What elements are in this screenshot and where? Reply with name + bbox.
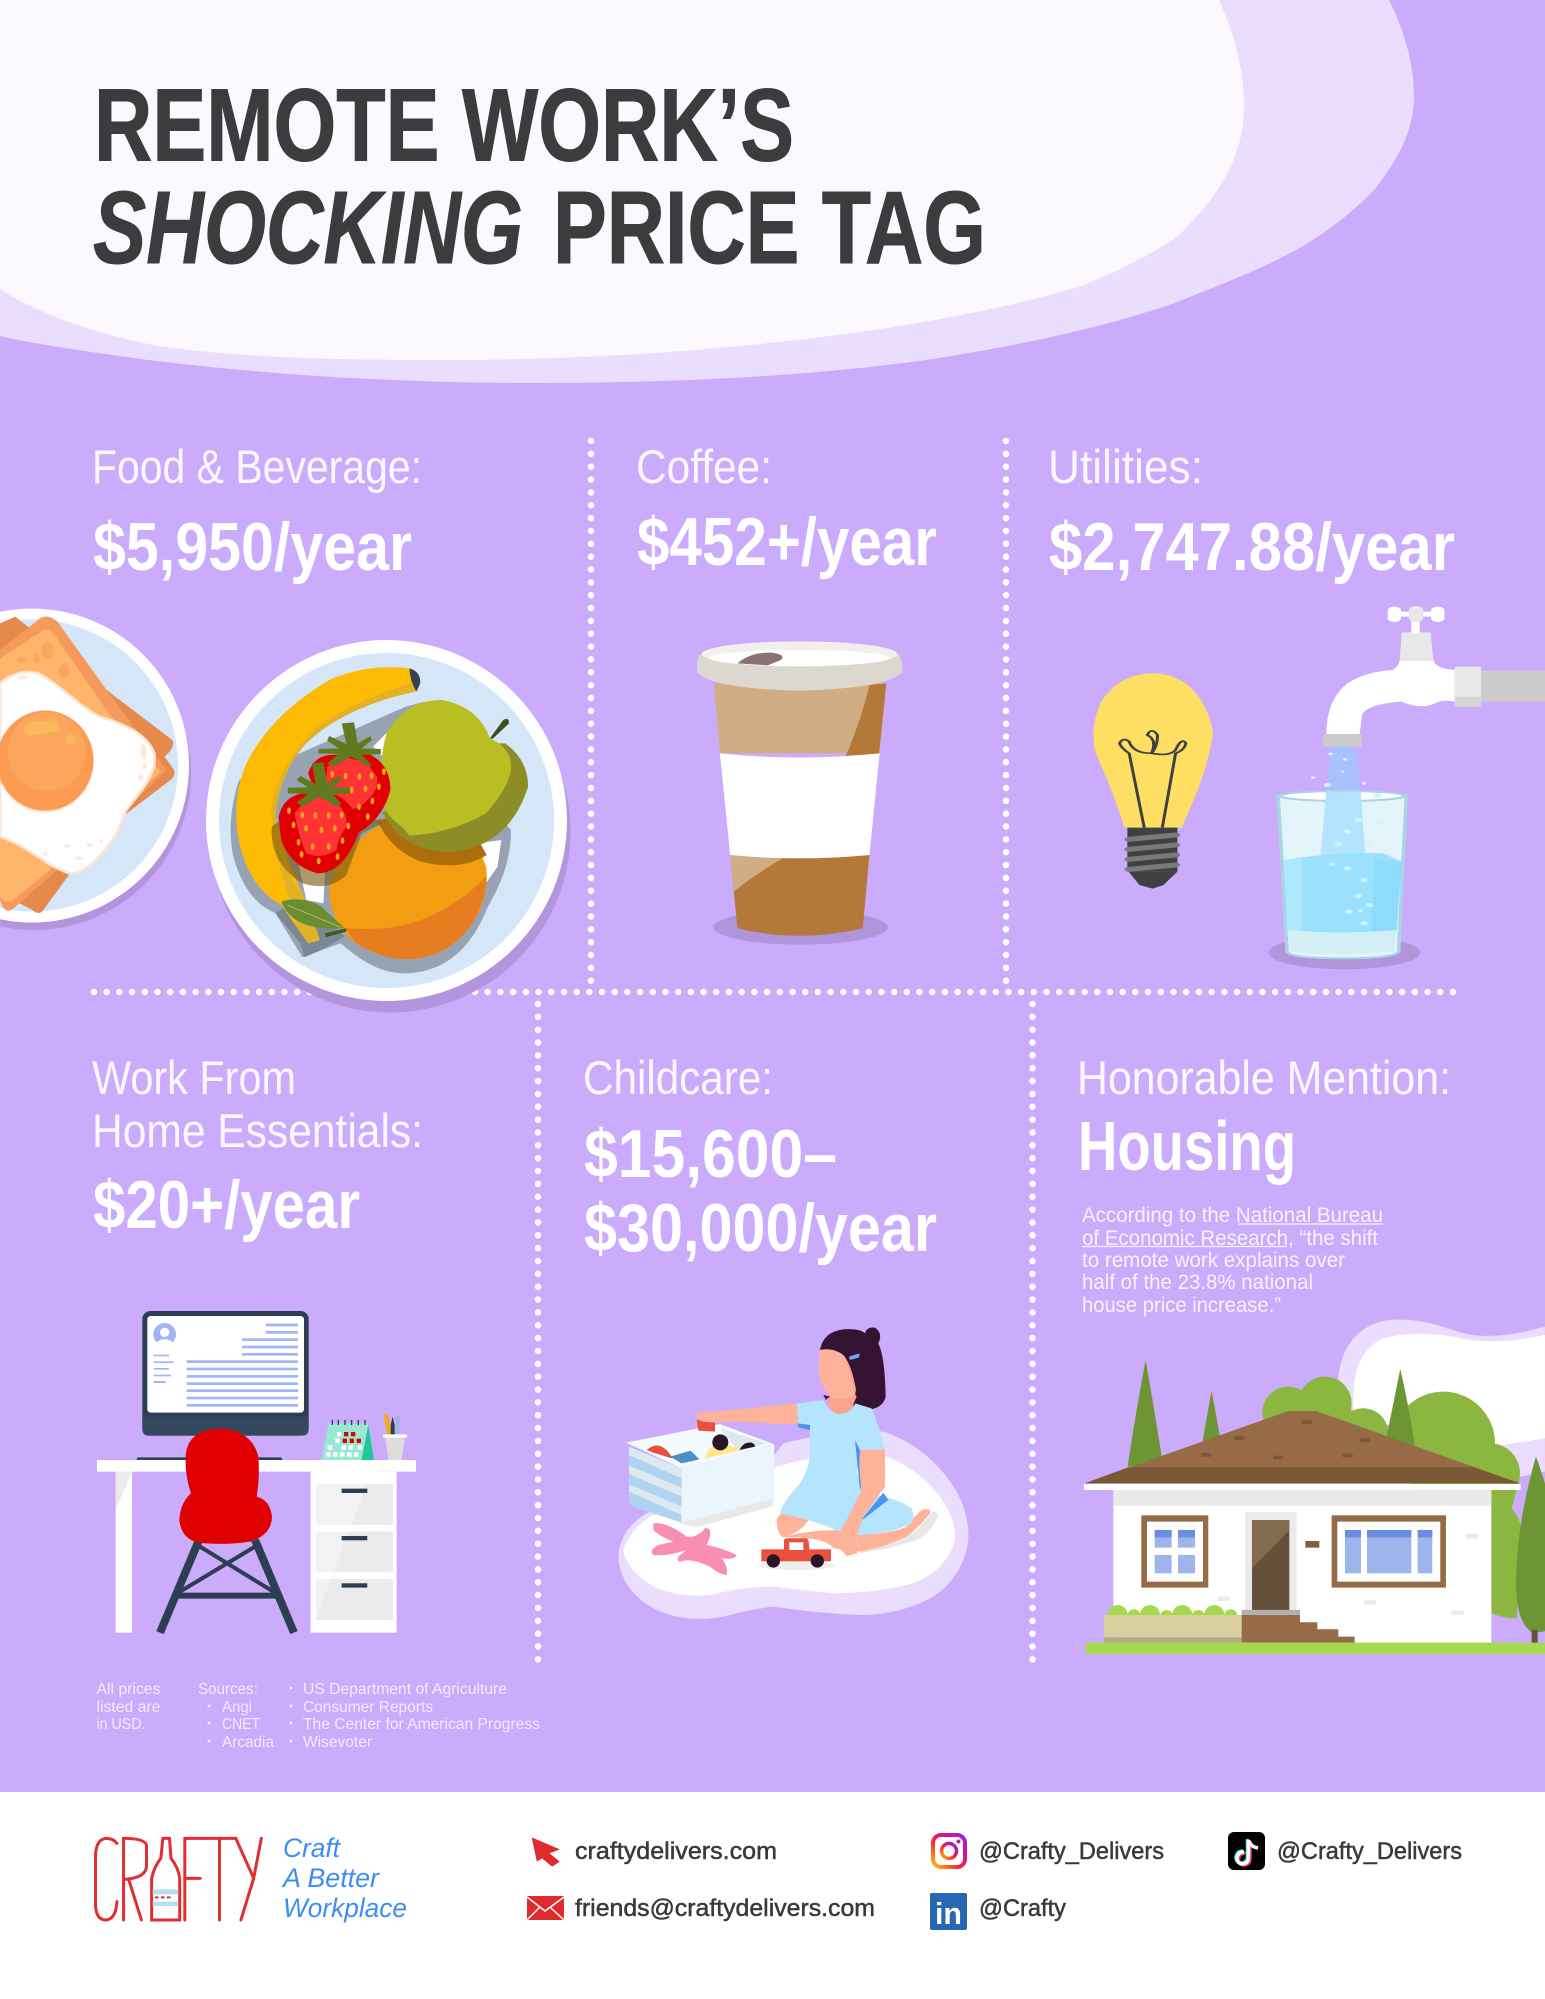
footnotes: US Department of Agriculture bbox=[303, 1681, 507, 1698]
childcare text: Childcare: bbox=[583, 1052, 773, 1105]
housing paragraph: house price increase.” bbox=[1082, 1294, 1281, 1317]
tagline bbox=[281, 1833, 407, 1923]
footnotes: Consumer Reports bbox=[303, 1699, 433, 1716]
icon: linkedin bbox=[930, 1893, 967, 1931]
food and beverage text: Food & Beverage: bbox=[92, 441, 422, 494]
tiktok handle: @Crafty_Delivers bbox=[1277, 1838, 1462, 1865]
footnotes: Angi bbox=[222, 1699, 252, 1716]
childcare text bbox=[583, 1052, 937, 1266]
linkedin handle: @Crafty bbox=[979, 1895, 1066, 1922]
honorable mention text: Honorable Mention: bbox=[1077, 1052, 1451, 1105]
website: craftydelivers.com bbox=[575, 1838, 777, 1865]
honorable mention text: Housing bbox=[1078, 1107, 1296, 1185]
footnotes: Wisevoter bbox=[303, 1734, 372, 1751]
icon: cursor bbox=[532, 1837, 560, 1867]
footer panel bbox=[0, 1792, 1545, 1999]
coffee text bbox=[636, 441, 937, 580]
icon: linkedin: in bbox=[935, 1896, 962, 1931]
title bbox=[93, 68, 986, 285]
tagline: A Better bbox=[281, 1863, 380, 1893]
title: PRICE TAG bbox=[553, 170, 986, 285]
illustration: desk and chair bbox=[97, 1311, 416, 1633]
footnotes: CNET bbox=[222, 1716, 260, 1733]
housing paragraph: half of the 23.8% national bbox=[1082, 1271, 1313, 1294]
instagram handle: @Crafty_Delivers bbox=[979, 1838, 1164, 1865]
childcare text: $15,600– bbox=[584, 1116, 837, 1192]
illustration: coffee cup bbox=[697, 641, 903, 945]
housing paragraph: of Economic Research, “the shift bbox=[1082, 1227, 1378, 1250]
work from home text: $20+/year bbox=[93, 1167, 360, 1243]
work from home text bbox=[92, 1052, 423, 1243]
dotted grid dividers bbox=[94, 441, 1456, 1660]
icon: envelope bbox=[527, 1896, 564, 1920]
title: SHOCKING bbox=[93, 170, 523, 285]
childcare text: $30,000/year bbox=[584, 1190, 937, 1266]
utilities text: Utilities: bbox=[1048, 441, 1203, 494]
illustration: light bulb bbox=[1093, 673, 1213, 889]
utilities text: $2,747.88/year bbox=[1049, 509, 1455, 585]
footnotes: Sources: bbox=[198, 1681, 258, 1698]
icon: instagram bbox=[933, 1835, 965, 1867]
housing paragraph: to remote work explains over bbox=[1082, 1249, 1345, 1272]
tagline: Craft bbox=[283, 1833, 341, 1863]
utilities text bbox=[1048, 441, 1455, 585]
header blob bbox=[0, 0, 1414, 383]
illustration: child playing bbox=[618, 1328, 968, 1619]
footnotes: The Center for American Progress bbox=[303, 1716, 540, 1733]
tagline: Workplace bbox=[283, 1893, 407, 1923]
illustration: egg and toast plate bbox=[0, 608, 191, 930]
coffee text: $452+/year bbox=[637, 504, 937, 580]
illustration: faucet and water glass bbox=[1268, 606, 1545, 969]
footnotes: Arcadia bbox=[222, 1734, 274, 1751]
crafty logo bbox=[96, 1838, 261, 1920]
illustration: fruit plate bbox=[206, 640, 570, 1012]
footnotes: in USD. bbox=[96, 1716, 146, 1733]
email: friends@craftydelivers.com bbox=[575, 1895, 875, 1922]
work from home text: Work From bbox=[92, 1052, 296, 1105]
honorable mention text bbox=[1077, 1052, 1451, 1185]
work from home text: Home Essentials: bbox=[92, 1105, 423, 1158]
housing paragraph bbox=[1082, 1204, 1383, 1317]
footnotes: listed are bbox=[96, 1699, 160, 1716]
illustration: house bbox=[1084, 1320, 1545, 1654]
footnotes: All prices bbox=[96, 1681, 161, 1698]
housing paragraph: According to the National Bureau bbox=[1082, 1204, 1383, 1227]
icon: tiktok bbox=[1228, 1832, 1265, 1870]
footnotes bbox=[96, 1681, 540, 1751]
title: REMOTE WORK’S bbox=[94, 68, 794, 182]
coffee text: Coffee: bbox=[636, 441, 772, 494]
food and beverage text: $5,950/year bbox=[93, 509, 412, 585]
food and beverage text bbox=[92, 441, 422, 585]
